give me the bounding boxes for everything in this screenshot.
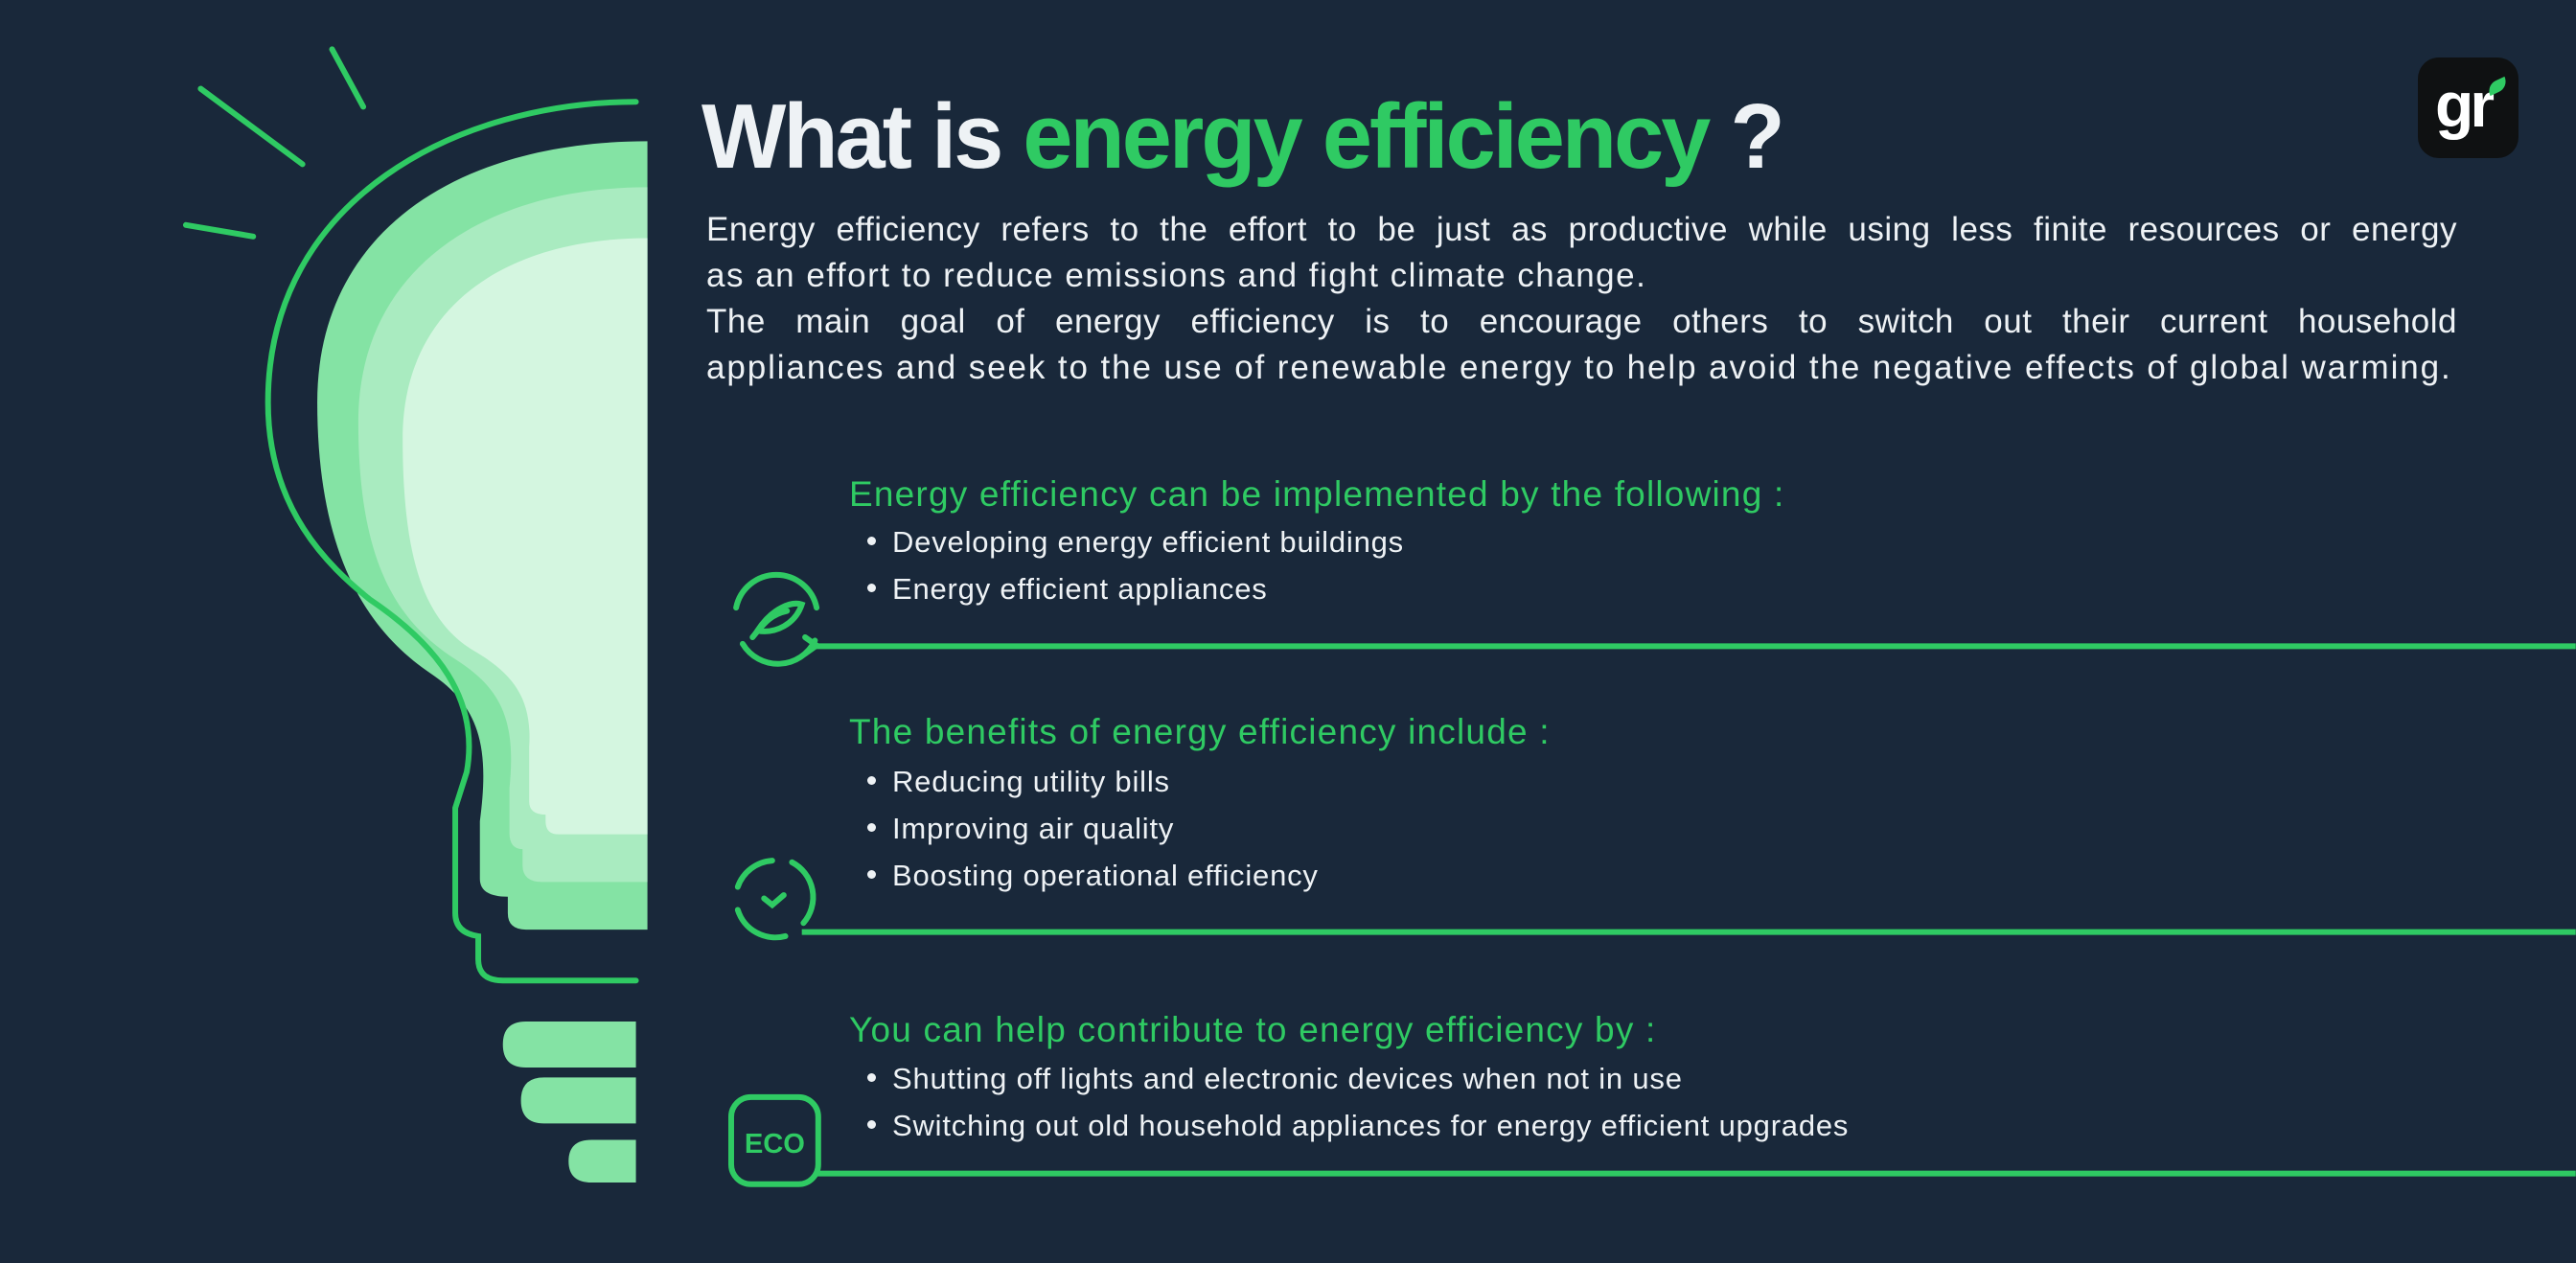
section 2 heading: The benefits of energy efficiency include : — [849, 712, 1551, 751]
line 1 — [816, 645, 2576, 648]
section 1 bullets: Energy efficient appliances — [892, 572, 1268, 606]
middle fill — [358, 187, 648, 882]
intro paragraph: as an effort to reduce emissions and fight climate change. — [706, 257, 1646, 294]
logo: gr — [2435, 69, 2491, 140]
line 2 — [802, 930, 2576, 933]
intro paragraph — [706, 211, 2457, 386]
section 2 bullets — [867, 765, 1319, 892]
section 3 bullets — [867, 1062, 1849, 1142]
section 2 bullets: Reducing utility bills — [892, 765, 1170, 798]
section 2 bullets: Improving air quality — [892, 812, 1174, 845]
base bars — [503, 1022, 636, 1068]
icon: leaf recycle — [736, 575, 816, 664]
logo — [2418, 57, 2518, 158]
bulb — [186, 49, 648, 1183]
outline — [268, 102, 636, 980]
section 1 bullets: Developing energy efficient buildings — [892, 525, 1404, 559]
icon: ECO — [731, 1097, 818, 1184]
icon: check cycle — [738, 861, 813, 937]
intro paragraph: The main goal of energy efficiency is to encourage others to switch out their current household — [706, 303, 2457, 340]
inner fill — [402, 239, 648, 835]
title: What is energy efficiency ? — [702, 85, 1782, 188]
line 3 — [816, 1172, 2576, 1175]
intro paragraph: appliances and seek to the use of renewable energy to help avoid the negative effects of global warming. — [706, 349, 2452, 386]
icon: ECO: ECO — [745, 1129, 805, 1160]
section 3 bullets: Shutting off lights and electronic devices when not in use — [892, 1062, 1683, 1095]
section 3 heading: You can help contribute to energy efficiency by : — [849, 1010, 1656, 1049]
section 3 bullets: Switching out old household appliances for energy efficient upgrades — [892, 1109, 1849, 1142]
outer fill — [317, 141, 648, 930]
intro paragraph: Energy efficiency refers to the effort to be just as productive while using less finite resources or energy — [706, 211, 2457, 248]
section 1 bullets — [867, 525, 1404, 606]
section 1 heading: Energy efficiency can be implemented by the following : — [849, 474, 1784, 514]
rays — [186, 49, 363, 237]
section 2 bullets: Boosting operational efficiency — [892, 859, 1319, 892]
